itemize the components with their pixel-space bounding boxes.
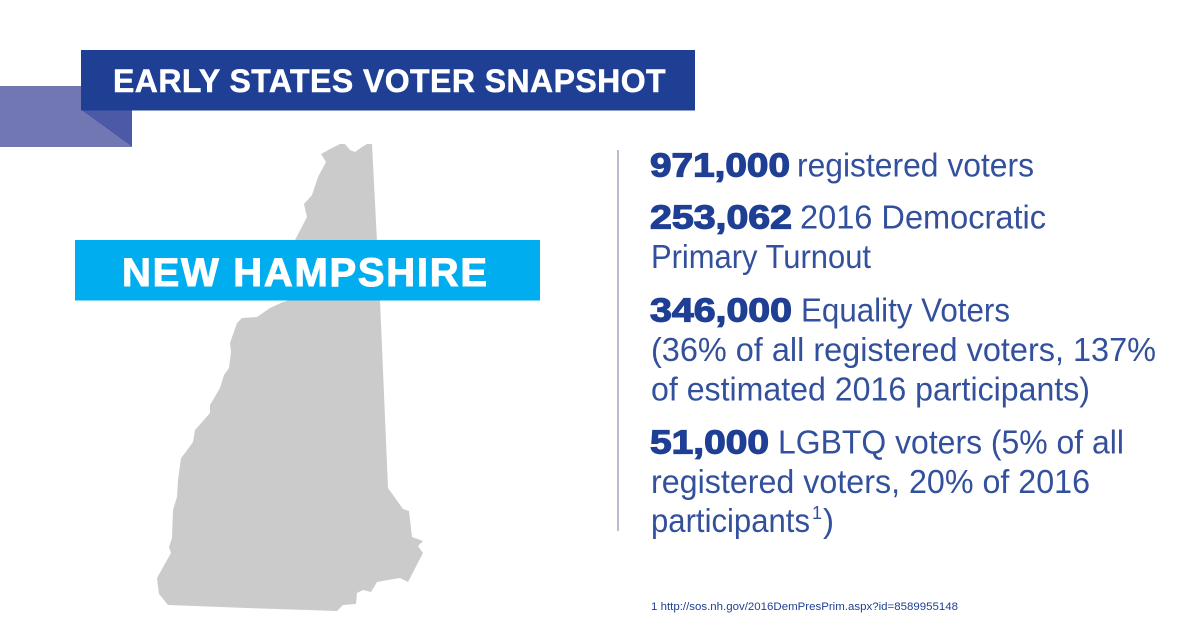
stat: LGBTQ voters: LGBTQ voters (5% of all — [778, 424, 1124, 460]
state banner — [75, 240, 540, 300]
map: New Hampshire — [157, 144, 423, 611]
stat: equality voters: Equality Voters — [801, 292, 1010, 328]
stat: primary turnout: 253,062 — [650, 198, 792, 236]
title: EARLY STATES VOTER SNAPSHOT — [113, 63, 666, 99]
footnote: 1 http://sos.nh.gov/2016DemPresPrim.aspx?id=8589955148 — [651, 601, 958, 613]
stat: LGBTQ voters: participants — [651, 502, 810, 539]
stat: primary turnout: Primary Turnout — [651, 238, 871, 275]
stat: registered voters: registered voters — [797, 146, 1034, 184]
title banner — [81, 50, 695, 110]
stat: primary turnout — [650, 198, 1046, 275]
stat: primary turnout: 2016 Democratic — [800, 198, 1046, 236]
state name: NEW HAMPSHIRE — [122, 251, 489, 295]
ribbon fold — [0, 86, 132, 147]
vertical divider — [617, 150, 619, 531]
stat: registered voters — [650, 146, 1034, 184]
stat: registered voters: 971,000 — [650, 146, 790, 184]
stat: LGBTQ voters: 1 — [812, 503, 822, 523]
stat: LGBTQ voters — [650, 424, 1124, 539]
stat: equality voters — [650, 292, 1156, 408]
stat: equality voters: of estimated 2016 participants) — [651, 370, 1090, 408]
stat: LGBTQ voters: registered voters, 20% of 2016 — [651, 463, 1090, 500]
stat: equality voters: (36% of all registered voters, 137% — [651, 331, 1156, 368]
stat: LGBTQ voters: 51,000 — [650, 424, 769, 460]
stat: equality voters: 346,000 — [650, 292, 792, 328]
stat: LGBTQ voters: ) — [823, 502, 834, 539]
